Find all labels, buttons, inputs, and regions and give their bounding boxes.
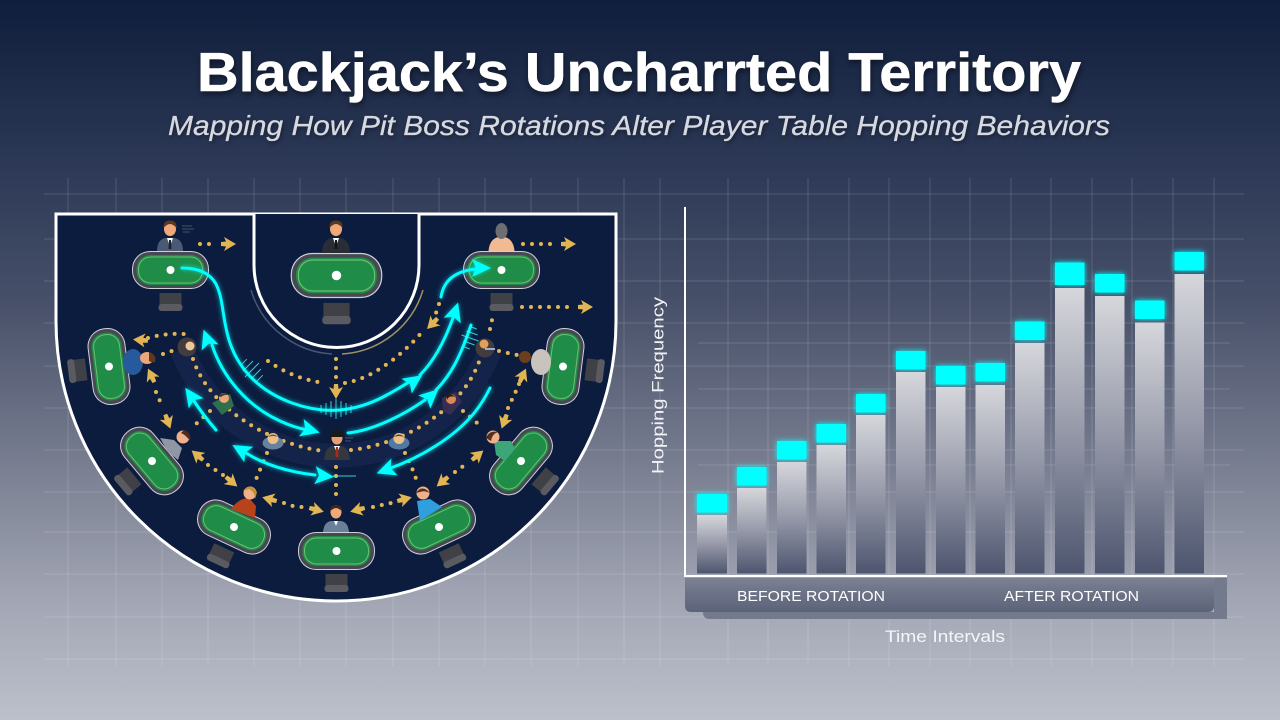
- energy bursts: [241, 327, 478, 476]
- table 5: [64, 326, 133, 410]
- table 3: [463, 251, 540, 311]
- player: ring purple: [442, 392, 462, 415]
- time band shadow: [703, 578, 1227, 619]
- gold dotted movement paths: [148, 244, 576, 507]
- bar 13: [1174, 252, 1204, 574]
- bar 7: [936, 366, 966, 574]
- player: grey right: [519, 349, 551, 375]
- table 4: [539, 326, 608, 410]
- panel: casino floor map: [56, 214, 616, 601]
- bar 8: [976, 363, 1005, 574]
- bar 1: [697, 494, 727, 574]
- player: grey lower left: [160, 430, 190, 460]
- player: bottom center: [323, 505, 349, 532]
- pit boss: [324, 430, 353, 460]
- bar 4: [816, 424, 846, 574]
- axes: [685, 207, 1227, 576]
- floor outline: [56, 214, 616, 601]
- notch echo arcs: [251, 290, 423, 354]
- table 7: [182, 494, 277, 580]
- player: top-right back view: [488, 223, 514, 251]
- players: [123, 220, 551, 532]
- table 9: [396, 494, 491, 580]
- bar 6: [896, 351, 926, 574]
- player: ring green: [212, 393, 234, 415]
- bars: [697, 252, 1204, 574]
- subtitle: Mapping How Pit Boss Rotations Alter Player Table Hopping Behaviors: [168, 110, 1110, 141]
- table 6: [96, 419, 191, 517]
- player: blue left: [123, 349, 155, 375]
- bar 9: [1015, 322, 1044, 574]
- cyan flow arrows: [178, 259, 491, 486]
- pit notch: [254, 214, 419, 347]
- player: ring blue right: [388, 433, 410, 450]
- player: green lower right: [486, 430, 515, 461]
- player: top-center dealer: [322, 220, 350, 253]
- table 1: [132, 251, 209, 311]
- player: ring blue left: [262, 433, 284, 450]
- player: red: [231, 486, 257, 518]
- ring band: [182, 350, 490, 456]
- y axis label: Hopping Frequency: [648, 296, 668, 474]
- table 8: [298, 532, 375, 592]
- table 2: [291, 253, 382, 324]
- bar chart: [648, 207, 1227, 646]
- bar 5: [856, 394, 886, 574]
- player: ring upper right: [476, 338, 495, 358]
- bar 12: [1135, 300, 1164, 574]
- before label: BEFORE ROTATION: [737, 588, 885, 605]
- bar 10: [1055, 262, 1084, 574]
- time band: [685, 578, 1214, 612]
- bar 11: [1095, 274, 1124, 574]
- x axis label: Time Intervals: [885, 627, 1005, 646]
- title: Blackjack’s Uncharrted Territory: [197, 41, 1081, 103]
- bar 3: [777, 441, 806, 574]
- tables: [64, 251, 608, 592]
- player: top-left dealer: [157, 220, 194, 251]
- player: light blue: [416, 486, 442, 521]
- bar 2: [737, 467, 766, 574]
- after label: AFTER ROTATION: [1004, 588, 1139, 605]
- player: ring upper left: [178, 338, 196, 356]
- gold arrowheads: [132, 237, 593, 519]
- table 10: [482, 419, 577, 517]
